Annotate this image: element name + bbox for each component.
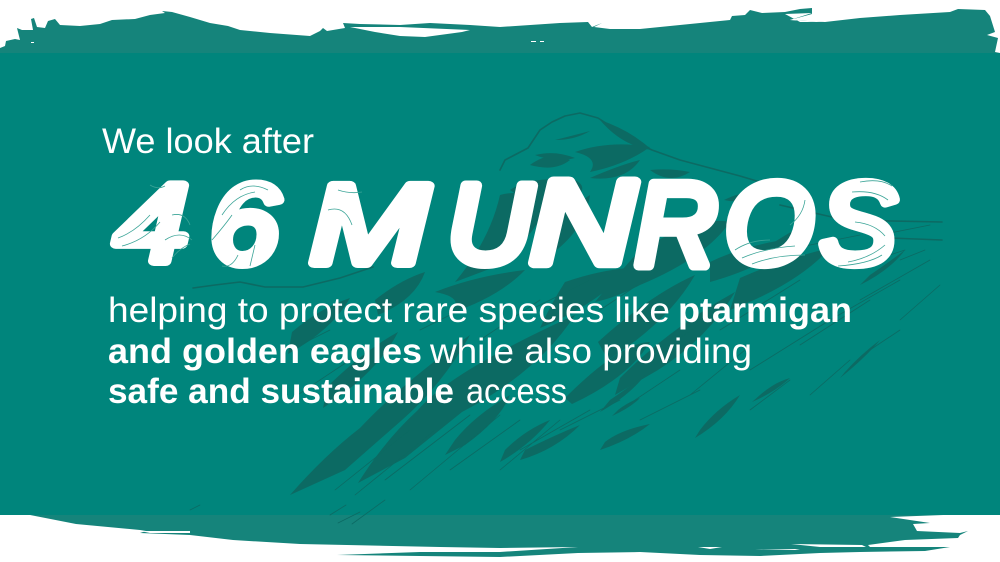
heading: 46 Munros brush lettering: U: [447, 163, 533, 287]
heading: 46 Munros brush lettering: [115, 157, 896, 290]
mountain outline: [500, 113, 942, 222]
heading: 46 Munros brush lettering: 4: [115, 161, 188, 285]
heading: 46 Munros brush lettering: R: [635, 158, 717, 290]
text block: description: helping to protect rare species like: [108, 291, 670, 330]
text block: description: access: [466, 372, 567, 411]
heading: 46 Munros brush lettering: N: [530, 157, 635, 289]
heading: 46 Munros brush lettering: S: [820, 161, 896, 288]
text block: description: while also providing: [429, 332, 752, 371]
text block: description: ptarmigan: [678, 291, 852, 330]
text block: description: safe and sustainable: [108, 372, 454, 411]
illustration: mountain line drawing: [190, 113, 942, 524]
ridge lines on the right and left: [193, 238, 942, 288]
text block: description: and golden eagles: [108, 332, 422, 371]
heading: 46 Munros brush lettering: M: [310, 162, 429, 288]
fine hatch strokes: [190, 225, 940, 524]
text: intro line: We look after: [102, 122, 314, 161]
heading: 46 Munros brush lettering: O: [725, 161, 814, 288]
heading: 46 Munros brush lettering: 6: [210, 163, 279, 288]
contour lines on lettering: [118, 181, 892, 266]
dark shaded streaks: [288, 120, 905, 495]
